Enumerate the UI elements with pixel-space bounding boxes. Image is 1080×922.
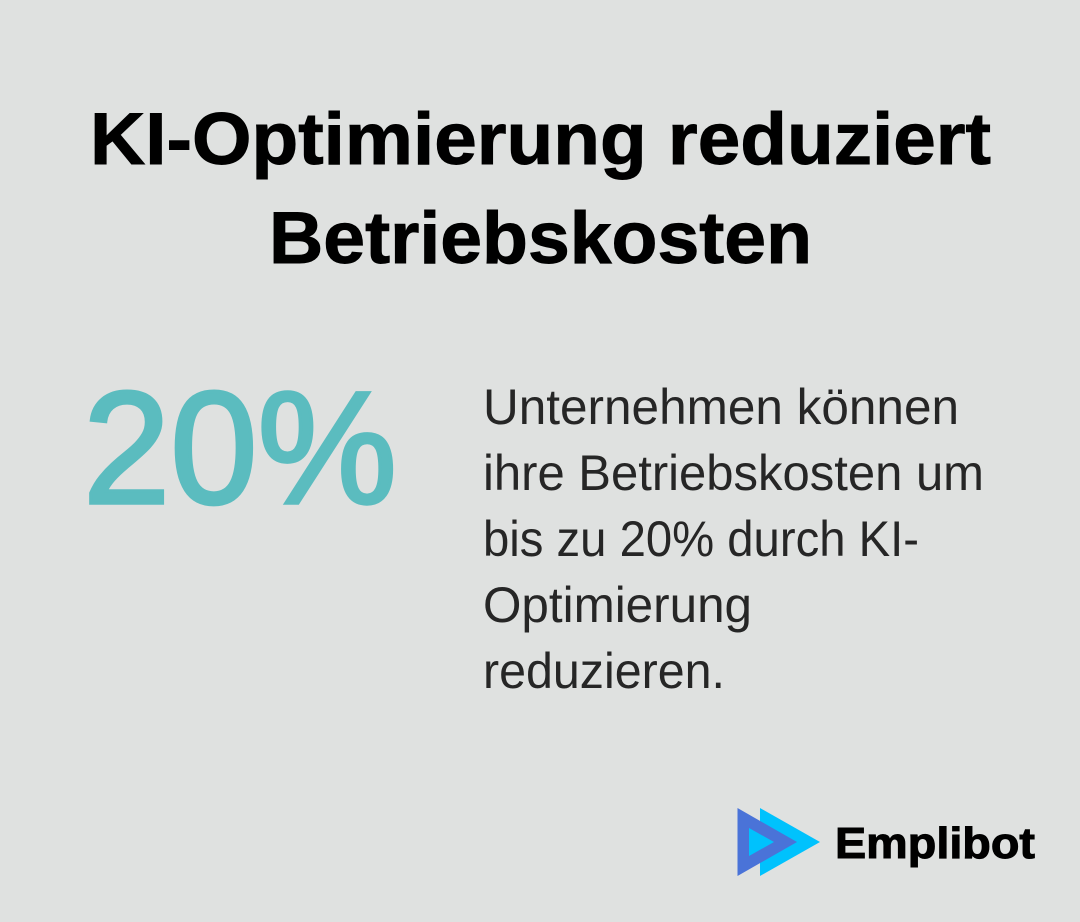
title: KI-Optimierung reduziert: [90, 99, 991, 180]
title: [90, 99, 991, 279]
description text: Optimierung: [483, 577, 752, 633]
description text: Unternehmen können: [483, 379, 959, 435]
description text: reduzieren.: [483, 643, 725, 699]
logo wordmark: Emplibot: [835, 819, 1035, 868]
icon: play triangles: [738, 808, 820, 876]
description text: bis zu 20% durch KI-: [483, 511, 919, 567]
title: Betriebskosten: [269, 198, 812, 279]
big statistic: 20%: 20%: [83, 358, 397, 537]
logo: Emplibot: [738, 808, 1035, 876]
description text: ihre Betriebskosten um: [483, 445, 984, 501]
description text: [483, 379, 984, 699]
